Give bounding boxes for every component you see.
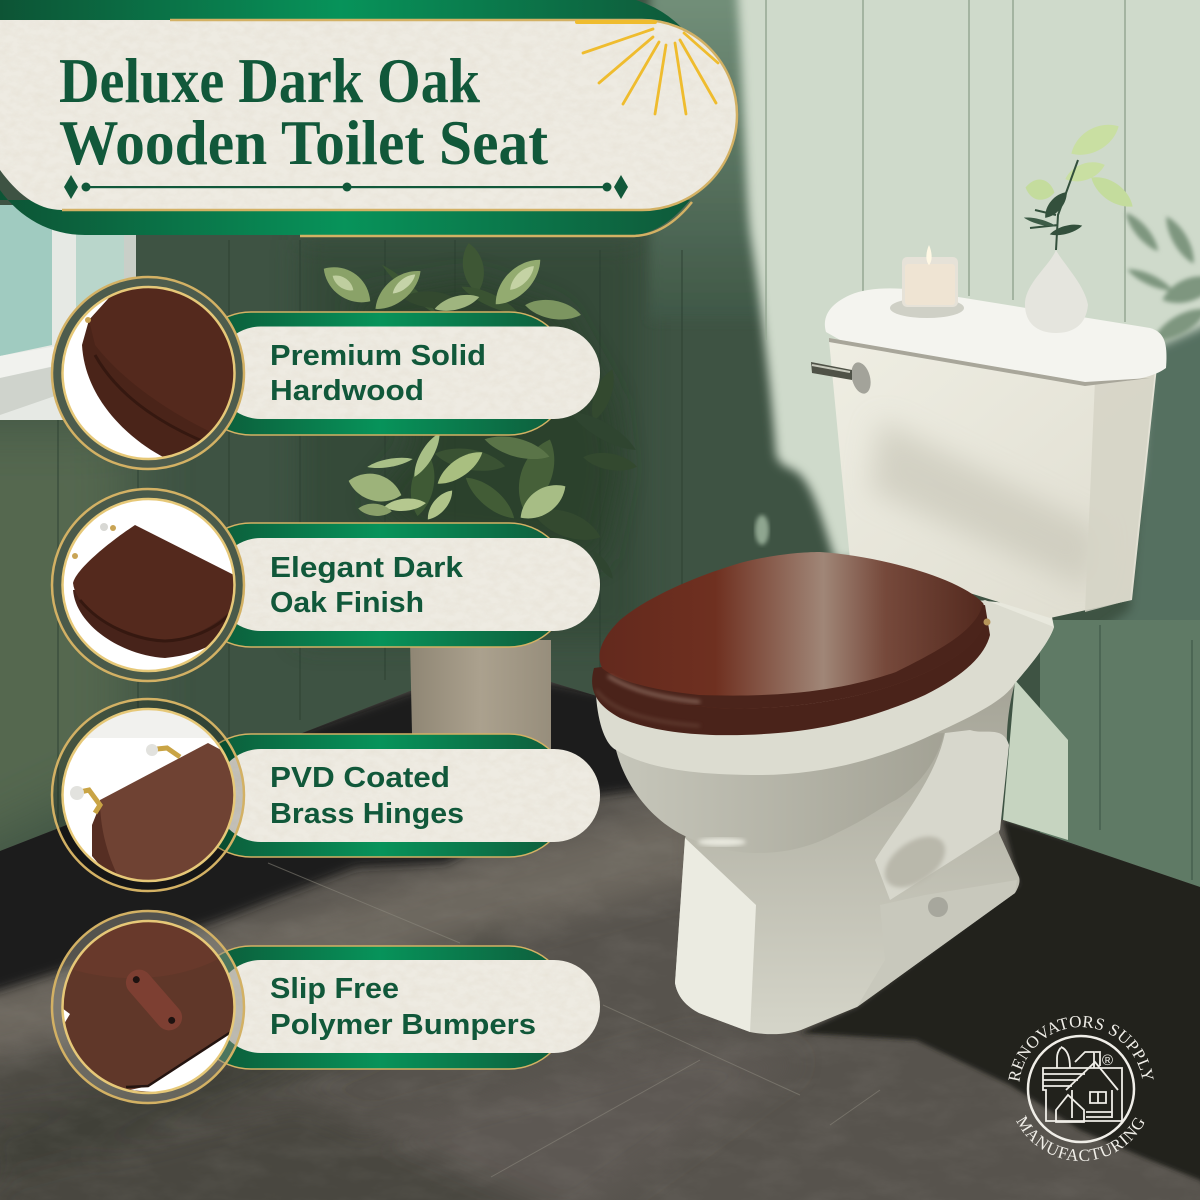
banner paper panel [0,20,737,210]
floor dark wedge near wall [0,682,640,1000]
ornamental divider [64,175,628,199]
title banner [0,0,737,236]
trap pocket [876,826,954,898]
label text [270,340,486,407]
label text: Hardwood [270,375,424,407]
paper label [215,960,600,1053]
green band [190,734,570,857]
seat photo [60,498,240,674]
paper label [215,326,600,419]
seat photo [64,710,234,880]
green band [190,312,570,435]
outer gold ring [52,699,244,891]
banner green top band [0,0,682,28]
leaves [317,241,640,581]
toilet pedestal [675,683,1020,1034]
title text [59,45,549,178]
inner gold ring [62,287,234,459]
seat photo [64,922,234,1092]
plant and pot [317,241,640,780]
vase and sprig [1023,116,1138,333]
feature 2: elegant dark oak finish [52,489,600,681]
paper label [215,749,600,842]
logo ring [1028,1036,1134,1142]
sunlit wall [735,0,1200,560]
leaf shadows on wall [1121,209,1200,348]
bumper [126,970,182,1030]
outer gold ring [52,489,244,681]
floor shadow right of toilet [801,820,1200,1200]
title text: Deluxe Dark Oak [59,45,480,116]
label text: Premium Solid [270,340,486,372]
toilet bowl [616,733,944,853]
seat ring [592,605,990,735]
label text [270,552,464,619]
sun rays icon [577,22,718,114]
toilet neck [900,600,1054,700]
pot [410,640,551,780]
label text: PVD Coated [270,762,450,794]
label text: Elegant Dark [270,552,464,584]
flush lever [811,360,874,396]
shaded upper wall by corner [650,0,770,320]
seat photo [64,288,234,458]
floor bolt [928,897,948,917]
toilet tank body [829,340,1157,618]
tank diagonal shadow [870,420,1100,590]
floor sun streaks [0,810,686,1200]
lighter lower-left wall [0,420,130,880]
light strip on lower wall [1003,680,1068,840]
toilet [592,116,1166,1034]
label text: Polymer Bumpers [270,1009,536,1041]
base step [857,880,1017,1007]
feature 1: premium solid hardwood [52,277,600,470]
label text: Oak Finish [270,587,424,619]
title text: Wooden Toilet Seat [59,107,549,178]
green band [190,946,570,1069]
seat lid [599,552,985,709]
logo arc text top: RENOVATORS SUPPLY [1008,1016,1154,1082]
green band [190,523,570,647]
window [0,205,136,420]
foliage shadow mass [350,280,620,560]
bowl highlight [698,838,746,846]
logo registered mark: ® [1102,1052,1113,1069]
bowl rim [596,600,1054,775]
ring highlight [596,690,700,726]
inner gold ring [62,709,234,881]
brand logo [1008,1016,1154,1162]
tank lid [825,288,1166,382]
feature 4: slip free polymer bumpers [52,911,600,1103]
wall panel grooves [58,240,682,850]
dark wall behind plant [300,240,640,640]
inner gold ring [62,921,234,1093]
small sun spot on wall [755,515,769,545]
floor [0,680,1200,1200]
trap highlight [875,730,1009,900]
outer gold ring [52,911,244,1103]
inner gold ring [62,499,234,671]
brass hinge [984,618,990,626]
logo arc text bottom: MANUFACTURING [1016,1115,1144,1162]
logo house [1043,1047,1122,1122]
lid rim [602,603,985,709]
paper label [215,538,600,631]
floor grain [218,1151,1068,1192]
label text: Slip Free [270,973,399,1005]
feature 3: pvd coated brass hinges [52,699,600,891]
label text [270,762,464,830]
wall below tank [1040,620,1200,900]
floor tile seams [268,863,880,1177]
outer gold ring [52,277,244,469]
shaded wall right of tank [1060,310,1200,660]
wall base [0,0,1200,900]
banner green bottom band [0,190,690,235]
pedestal lit front [675,838,756,1032]
label text: Brass Hinges [270,798,464,830]
candle on coaster [890,245,964,318]
label text [270,973,536,1041]
lid rim highlight [608,676,700,702]
